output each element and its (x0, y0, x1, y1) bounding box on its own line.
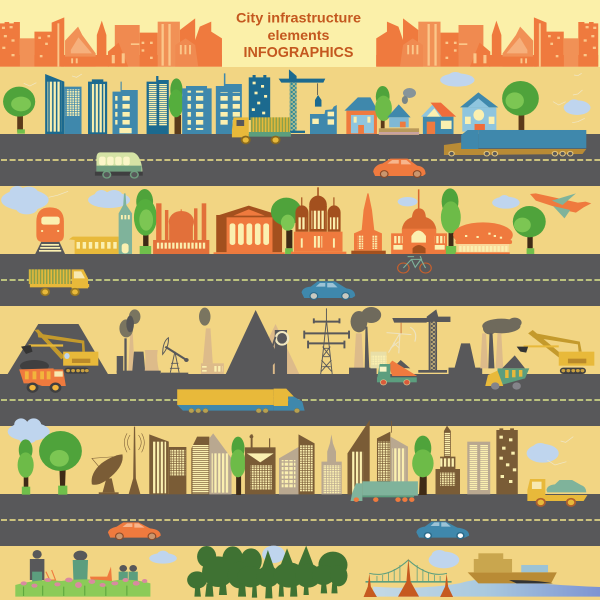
tower with triangle (245, 434, 276, 494)
office E (182, 86, 212, 134)
people and flowers (15, 550, 150, 597)
skyscrapers 2 (191, 433, 232, 494)
road markings (1, 160, 600, 520)
title: INFOGRAPHICS (244, 44, 354, 61)
car orange (108, 522, 161, 540)
header band (0, 0, 600, 67)
office C (113, 82, 138, 134)
title (236, 10, 361, 61)
bicycle (398, 256, 431, 273)
row 1: city and houses (3, 69, 591, 178)
plant with smoke (199, 308, 224, 374)
bridge (364, 558, 453, 597)
satellite dish (92, 454, 123, 494)
tower G (249, 75, 270, 120)
round building (453, 222, 513, 254)
orange tower (351, 193, 386, 254)
tree narrow (18, 439, 34, 495)
tree large (39, 431, 82, 495)
airplane (530, 193, 591, 218)
excavator left (21, 329, 98, 374)
title: City infrastructure (236, 10, 361, 26)
title: elements (268, 27, 330, 43)
dump truck orange (19, 360, 66, 392)
car blue (416, 522, 469, 539)
brown tower (496, 428, 518, 494)
house 1 (344, 97, 378, 134)
skyscraper B (88, 79, 107, 134)
white tower (467, 442, 490, 494)
tow truck with car (527, 479, 587, 506)
skyline: left (0, 17, 222, 67)
cloud and birds right (527, 437, 573, 465)
cloud big (1, 186, 49, 214)
skyscraper group A (45, 74, 82, 134)
smoke stacks right (480, 318, 522, 368)
tree: left (3, 87, 35, 134)
house 2 with smoke (387, 88, 416, 127)
cloud bridge (429, 550, 459, 568)
tree: narrow (169, 78, 183, 134)
semi truck blue (444, 130, 586, 156)
stepped tower (436, 426, 460, 494)
tree: house (375, 86, 392, 128)
row 2: landmarks (1, 186, 591, 299)
road 3 (0, 374, 600, 426)
tower teal (119, 193, 132, 254)
road 1 (0, 134, 600, 186)
row 3: heavy industry (8, 307, 594, 413)
oil pump (161, 338, 189, 374)
smoke stacks centre (349, 307, 387, 374)
station yellow (69, 237, 119, 254)
classic tower taupe (321, 434, 342, 494)
factory chimneys left (117, 309, 161, 374)
bus (95, 152, 143, 178)
office F (216, 73, 242, 134)
tree 6 (513, 206, 546, 254)
buildings taupe and brown (279, 434, 315, 494)
truck: stripes bed (232, 117, 291, 144)
cloud (8, 418, 50, 444)
birds row 1 (24, 73, 585, 123)
tree narrow 2 (230, 437, 246, 495)
skyscrapers 1 (149, 434, 186, 494)
truck yellow (29, 269, 89, 295)
domed hall (391, 189, 447, 254)
tree 5 (441, 188, 461, 254)
skyline: right (376, 17, 598, 67)
low building H (310, 105, 337, 134)
excavator right (517, 330, 594, 374)
tree: right (502, 81, 539, 130)
fence and flowers (379, 128, 419, 135)
tree 3 (134, 189, 157, 254)
dump truck yellow (485, 355, 529, 390)
car orange (373, 159, 426, 177)
tree narrow 3 (412, 436, 434, 495)
water (373, 579, 600, 597)
cloud 2 (88, 190, 130, 208)
road 2 (0, 254, 600, 306)
tower D (147, 76, 169, 134)
car blue (302, 281, 355, 299)
crane (279, 69, 325, 133)
mosque (153, 203, 209, 254)
pyramid heaps with mine (226, 310, 299, 374)
green semi truck (351, 481, 418, 502)
ship (468, 553, 557, 583)
house 3 (421, 103, 456, 134)
bird (49, 191, 68, 197)
house 4 (460, 92, 498, 132)
tipper truck (377, 360, 417, 385)
crane dark with oil derrick (387, 309, 450, 373)
tree 4 (271, 198, 302, 254)
train (35, 207, 65, 254)
cooling stacks (449, 343, 482, 374)
classical building (214, 206, 285, 254)
coal heap (8, 324, 108, 374)
cloud small (149, 551, 177, 564)
church domes (291, 187, 346, 254)
cloud behind forest (262, 546, 285, 563)
road 4 (0, 494, 600, 546)
power pylon (304, 308, 349, 374)
forest (187, 546, 347, 598)
row 4: modern skyline (8, 418, 600, 598)
semi truck yellow (177, 389, 305, 413)
skyscrapers 3 (347, 420, 408, 494)
clouds row 1 (440, 72, 591, 115)
radio mast (124, 427, 144, 494)
clouds row 2 (398, 195, 520, 209)
